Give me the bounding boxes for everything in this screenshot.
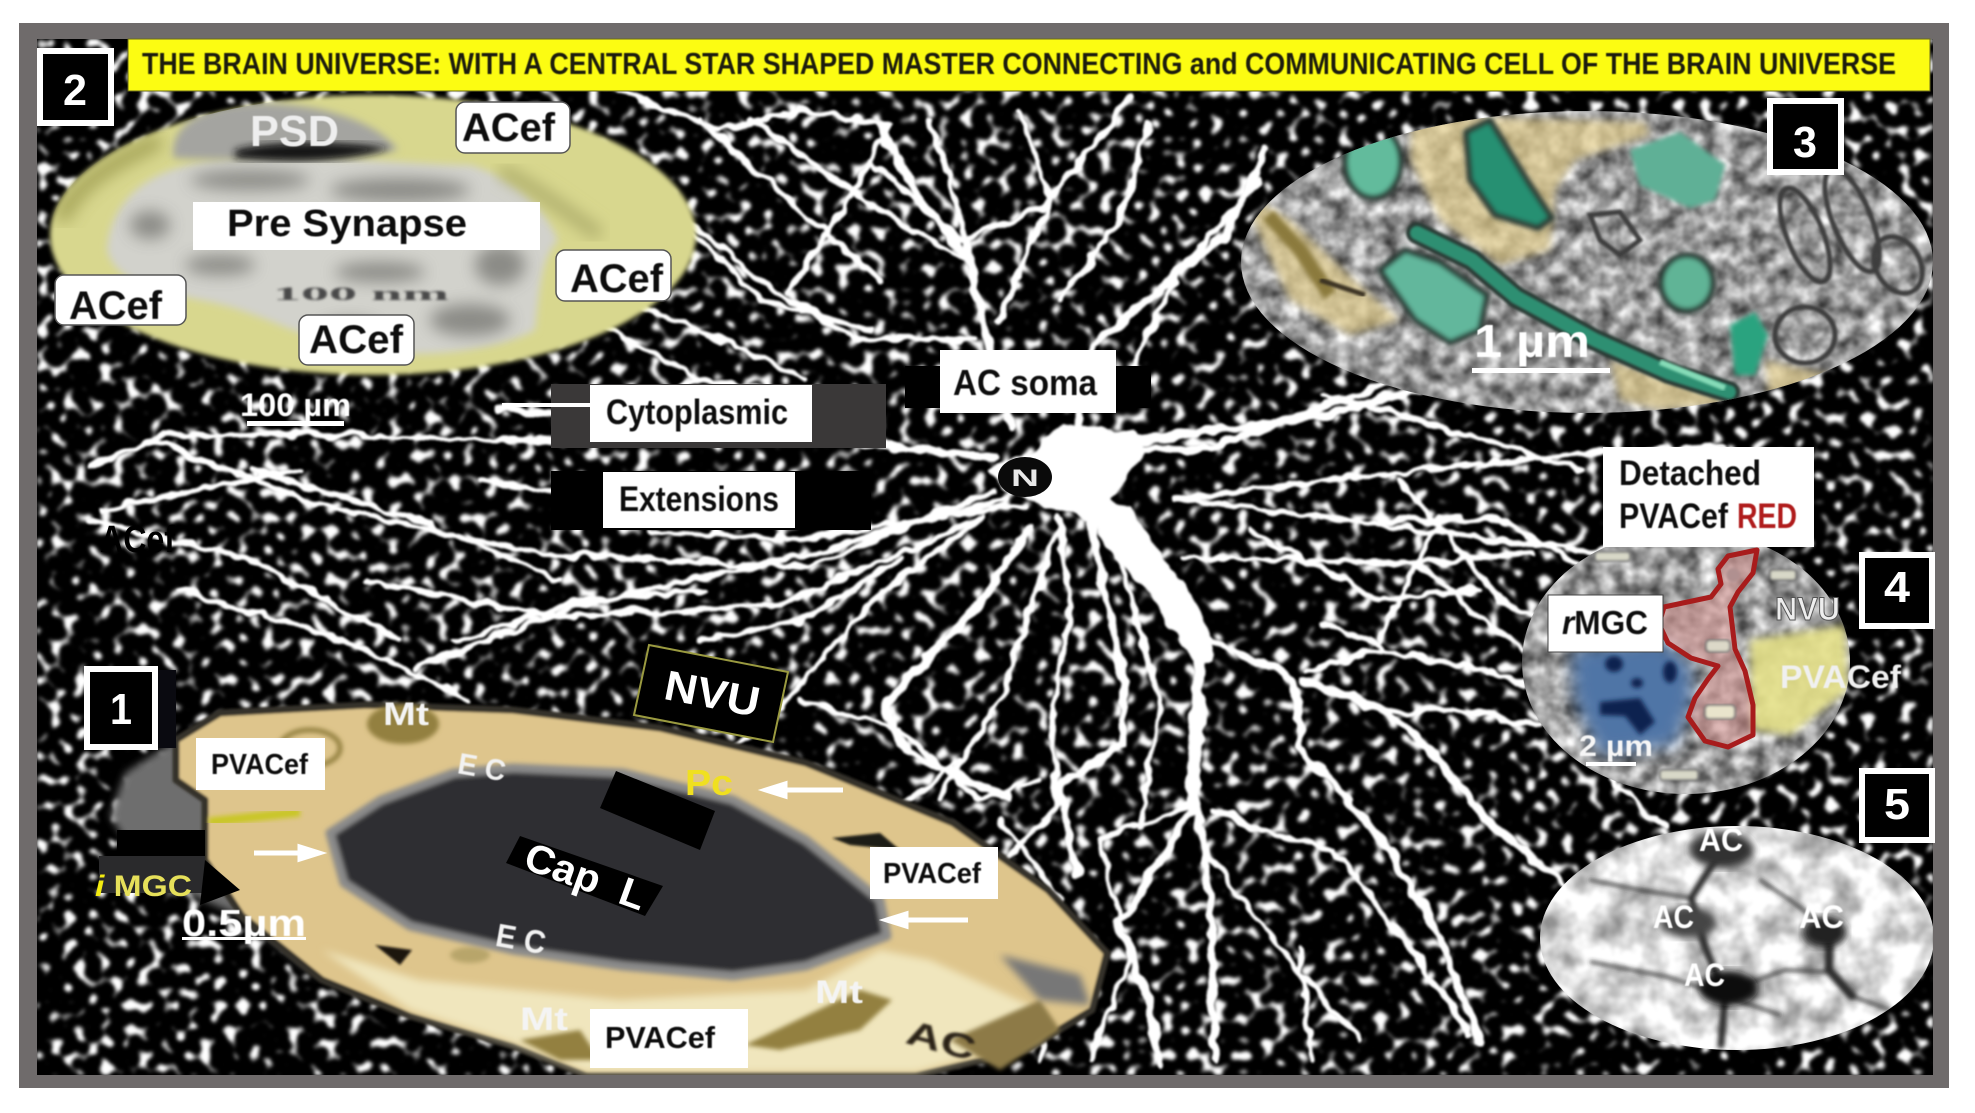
black block (600, 771, 715, 850)
capillary lumen (330, 768, 887, 976)
label: AC soma: AC soma (953, 362, 1098, 403)
label: Pre Synapse (193, 202, 540, 250)
yellow streak (209, 812, 300, 822)
label: Detached PVACef RED: Detached (1619, 454, 1761, 493)
postsynaptic density (173, 103, 398, 160)
label: PVACef upper left (196, 738, 325, 790)
label: PVACef right (870, 847, 998, 899)
label: iMGC: i MGC (95, 870, 192, 903)
label: 100 nm: 100 nm (273, 284, 449, 305)
scale bar: 2 um: 2 µm (1579, 730, 1653, 763)
label: AC bottom: AC (1684, 957, 1725, 993)
badge 3 (1770, 101, 1841, 172)
scale bar: 1 um (1472, 315, 1610, 373)
label: rMGC (1548, 595, 1663, 652)
label: PVACef right: PVACef (883, 858, 981, 890)
label: PSD: PSD (250, 107, 339, 156)
label: Mt right: Mt (815, 974, 863, 1010)
label: ACef left (55, 275, 186, 328)
brown mitochondria (280, 704, 1060, 1070)
label: Cap L: Cap L (519, 835, 652, 919)
panel 4: retinal glial micrograph (87, 447, 1934, 1075)
badge 1 (87, 669, 176, 748)
label: NVU (634, 645, 788, 742)
tan perivascular astrocyte endfeet (176, 705, 1107, 1075)
presynaptic terminal (60, 103, 600, 354)
label: NVU: NVU (661, 661, 764, 726)
label: Detached PVACef RED (1603, 447, 1814, 547)
badge 5 (1862, 771, 1932, 840)
faint dark label in background: ACef (100, 519, 175, 561)
label: Extensions (551, 471, 871, 530)
panel 3: mitochondria micrograph (1240, 110, 1935, 415)
scale bar: 0.5 um: 0.5µm (182, 903, 306, 945)
badge 4: 4 (1884, 563, 1911, 612)
mitochondria outlines (1590, 162, 1932, 363)
label: E C lower: E C (493, 917, 549, 961)
label: NVU small: NVU (1775, 591, 1840, 627)
title banner (128, 39, 1930, 91)
arrow lower right (887, 914, 968, 926)
label: PVACef upper left: PVACef (211, 749, 308, 781)
label: ACef left: ACef (69, 284, 163, 328)
arrow left (254, 847, 319, 859)
central star shaped astrocyte with cytoplasmic extensions (88, 80, 1726, 1065)
label: AC soma (905, 350, 1151, 413)
yellow PVACef region (1750, 625, 1848, 735)
label: Mt top: Mt (383, 696, 429, 732)
black patch left (117, 830, 205, 856)
label: Pre Synapse: Pre Synapse (227, 203, 467, 245)
yellow astrocyte regions (1240, 115, 1850, 410)
blue rMGC nucleus (1571, 640, 1692, 755)
detached PVACef red outline (1659, 550, 1757, 747)
arrow upper right (766, 784, 843, 796)
label: PVACef bottom (590, 1009, 748, 1068)
label: ACef right: ACef (570, 257, 664, 301)
label: Mt bottom: Mt (520, 1001, 568, 1037)
badge 4 (1862, 555, 1932, 626)
badge 1: 1 (110, 685, 132, 734)
label: Detached PVACef RED: RED (1737, 497, 1797, 536)
label: PVACef panel 4: PVACef (1780, 659, 1901, 695)
label: ACef bottom: ACef (309, 318, 404, 362)
dark gaps (375, 945, 412, 965)
badge 2 (40, 51, 111, 123)
nucleus N (998, 457, 1052, 497)
label: AC top: AC (1699, 822, 1743, 858)
small mitochondrion rectangles (1595, 552, 1796, 780)
green mitochondria (1345, 120, 1768, 375)
label: AC left: AC (1653, 899, 1694, 935)
label: dark AC: AC (902, 1014, 980, 1069)
scale bar: 100 um: 100 µm (240, 387, 351, 423)
panel 1: neurovascular unit capillary (87, 645, 1107, 1075)
label: ACef top: ACef (462, 106, 556, 150)
label: Detached PVACef RED: PVACef (1619, 497, 1728, 536)
scale bar: 1 um: 1 µm (1474, 315, 1590, 367)
badge 5: 5 (1884, 780, 1910, 829)
badge 2: 2 (63, 66, 87, 115)
label: PVACef bottom: PVACef (605, 1020, 716, 1055)
label: AC right: AC (1799, 899, 1844, 935)
label: E C upper: E C (455, 747, 508, 788)
label: rMGC: rMGC (1562, 604, 1648, 641)
panel 2: synapse ellipse (50, 95, 696, 375)
label: Extensions: Extensions (619, 480, 779, 519)
label: Cytoplasmic with pointer: Cytoplasmic (606, 393, 788, 432)
gray left end of vessel (110, 740, 320, 980)
soma body (990, 425, 1215, 665)
nucleus N: N (1011, 465, 1039, 492)
badge 3: 3 (1793, 118, 1817, 167)
pale lower cytoplasm (322, 950, 1040, 1072)
label: Pc pericyte: Pc (685, 762, 733, 803)
panel 5: stained astrocytes micrograph (1538, 822, 1934, 1052)
label: Cytoplasmic with pointer (502, 384, 886, 448)
